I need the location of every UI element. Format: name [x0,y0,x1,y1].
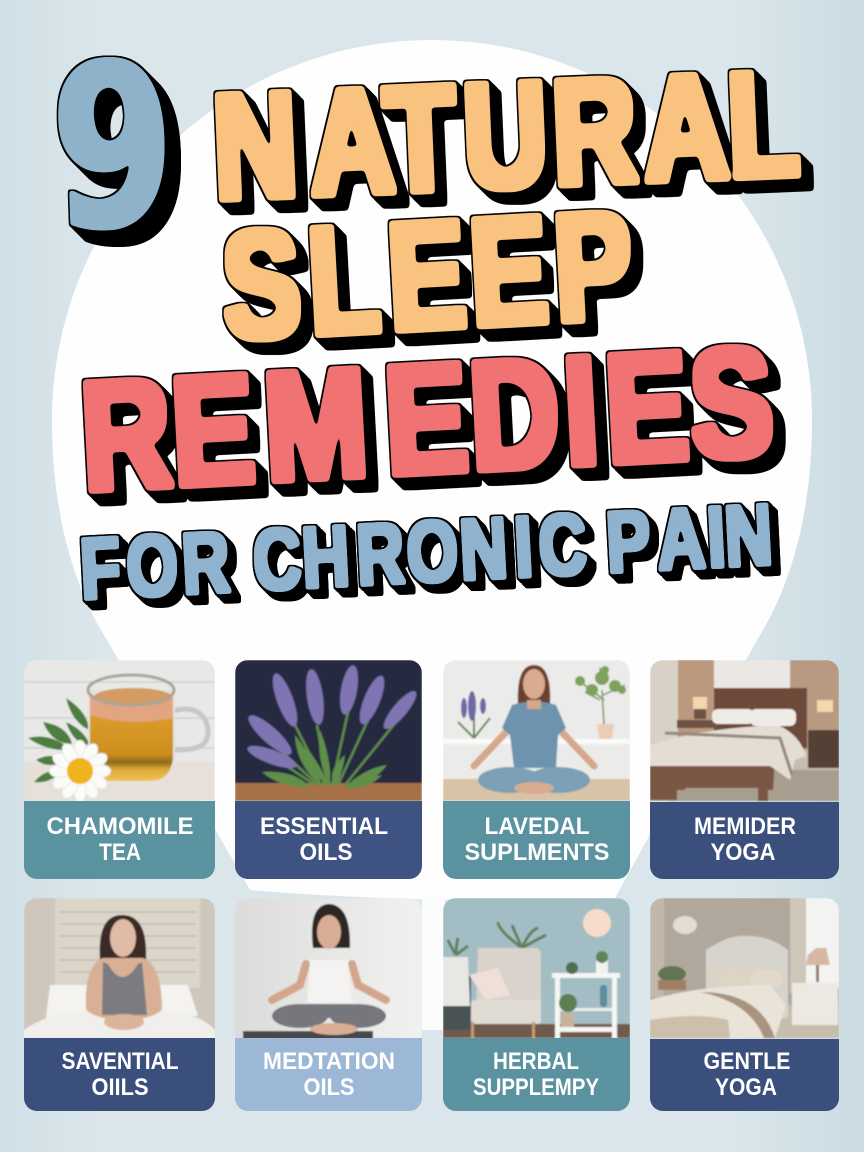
card: essential oils [235,660,422,879]
photo: tea cup and daisy [24,660,215,802]
label band [24,1038,215,1111]
label band [650,1039,839,1111]
subtitle FOR CHRONIC PAIN: FOR CHRONIC PAIN [78,486,775,618]
card: chamomile tea [24,660,215,879]
card: medtation oils [235,898,422,1111]
label text: MEDTATION [263,1048,395,1075]
photo: woman on bed [24,898,215,1038]
label band [650,802,839,879]
label band [443,801,630,879]
title numeral 9: 9 [48,17,178,280]
label text: OIILS [92,1074,148,1101]
card: gentle yoga [650,898,839,1111]
card: lavedal suplments [443,660,630,879]
label text: MEMIDER [694,813,796,840]
label band [24,801,215,879]
label text: SAVENTIAL [62,1048,178,1075]
card: memider yoga [650,660,839,879]
white backdrop circle [52,40,812,1030]
label text: YOGA [710,839,776,866]
label text: SUPLMENTS [464,839,610,866]
label text: OILS [304,1074,354,1101]
label text: YOGA [715,1074,777,1101]
title word SLEEP: SLEEP [218,179,636,372]
card: herbal supplempy [443,898,630,1111]
card: saventail oiils [24,898,215,1111]
photo: pastel bedroom [650,898,839,1038]
photo: woman cross-legged [235,898,422,1039]
photo: woman meditating [443,660,630,801]
title word REMEDIES: REMEDIES [77,314,777,523]
title word NATURAL: NATURAL [210,39,802,231]
label text: OILS [300,839,352,866]
title [48,17,802,618]
label band [235,801,422,879]
photo: lavender plant [235,660,422,801]
label text: HERBAL [493,1048,579,1075]
photo: warm bedroom [650,660,839,801]
label text: CHAMOMILE [46,813,194,840]
label band [235,1038,422,1111]
label band [443,1038,630,1111]
photo: calm living room [443,898,630,1038]
label text: GENTLE [704,1048,790,1075]
label text: SUPPLEMPY [473,1074,599,1101]
label text: LAVEDAL [484,813,590,840]
label text: ESSENTIAL [260,813,388,840]
label text: TEA [99,839,141,866]
